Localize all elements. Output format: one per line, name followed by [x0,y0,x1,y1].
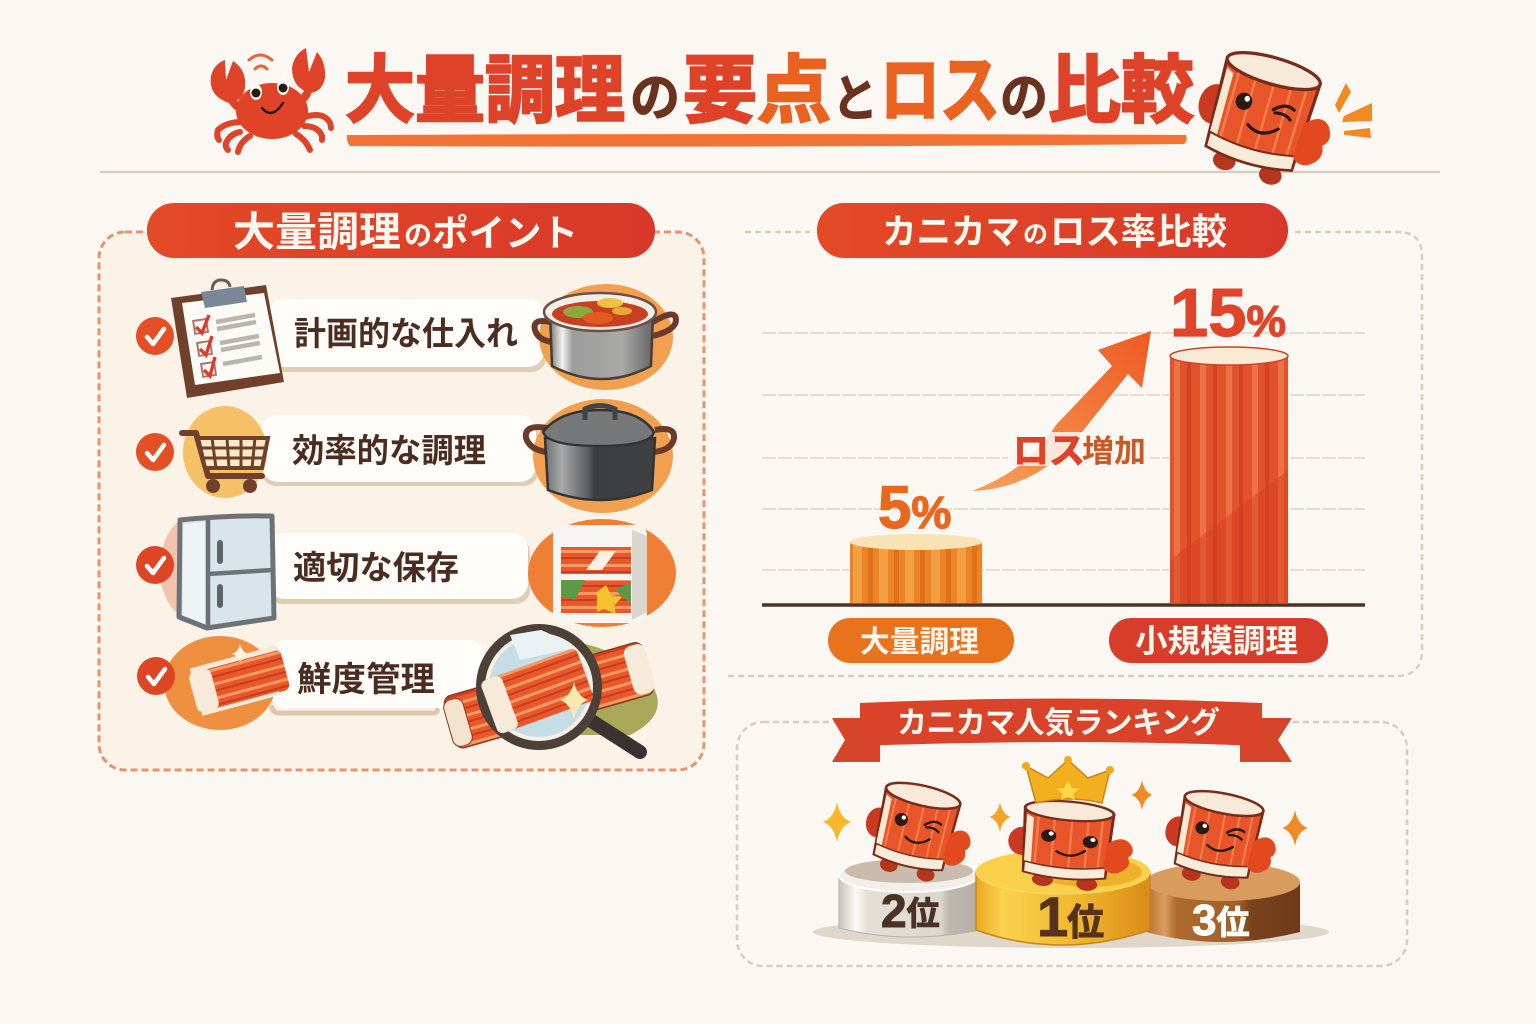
heading: cooking points: の [404,220,432,251]
title: と [832,71,878,127]
icon: soup pot [535,284,676,390]
bar: large batch 5% [850,534,982,603]
mascot: 1st [1005,797,1137,895]
podium: 2nd [839,858,980,937]
axis [762,603,1365,607]
row text 1: 計画的な仕入れ [294,315,518,352]
icon: check 2 [136,433,174,471]
ribbon heading: カニカマ人気ランキング [897,707,1220,740]
row: proper storage [136,516,676,628]
label: large batch [828,618,1014,663]
panel: ranking [737,698,1407,966]
title: 点 [757,49,831,132]
podium: 2nd: 位 [907,895,940,932]
label: loss increase: ロス [1013,430,1085,471]
heading: cooking points [147,203,655,258]
title [345,49,1194,132]
label: large batch: 大量調理 [860,626,979,659]
row: efficient cooking [136,399,674,513]
title: 比較 [1048,49,1194,132]
ribbon heading [832,698,1292,762]
label pill 2 [262,415,538,486]
icon: dark pot [526,399,674,513]
icon: sparkle 1 [823,802,851,842]
icon: magnifier over stick [441,629,658,752]
mascot: 2nd [856,775,981,889]
label: small batch [1109,618,1328,663]
title underline [347,134,1187,147]
title: 大量調理 [345,49,625,132]
label pill 3 [268,533,530,604]
icon: fridge [136,516,274,628]
mascot: 3rd [1157,784,1285,896]
podium: 3rd [1146,863,1300,945]
icon: check 1 [136,317,174,355]
label: loss increase: 増加 [1082,434,1146,469]
podium: 2nd: 2 [881,885,907,937]
label pill 4 [270,640,485,713]
row text 2: 効率的な調理 [292,432,486,469]
title: の [630,70,680,128]
row text 4: 鮮度管理 [297,661,435,699]
podium shadow [813,916,1329,948]
value: 5%: 5% [878,474,951,541]
row: planned purchasing [136,280,676,398]
heading: loss rate: カニカマ [882,213,1020,252]
arrow: loss increase [972,331,1151,491]
heading: loss rate: の [1023,221,1048,249]
icon: burst lines [1335,83,1372,138]
heading: loss rate: ロス率比較 [1050,211,1227,252]
title: ロス [880,49,1000,132]
podium: 1st [976,850,1150,948]
row: freshness management [137,629,658,752]
icon: crown [1022,756,1114,803]
heading: cooking points: ポイント [432,213,578,254]
podium: 1st: 位 [1067,902,1104,943]
icon: check 4 and stick [137,636,291,730]
icon: sparkle 4 [1282,810,1308,846]
podium: 3rd: 位 [1216,904,1249,941]
podium: 3rd: 3 [1192,896,1216,945]
label pill 1 [268,299,546,372]
mascot: title character [1182,41,1347,197]
podium: 1st: 1 [1037,885,1068,948]
value: 15%: 15% [1170,275,1286,351]
icon: sparkle 3 [1132,780,1152,810]
title: 要 [683,49,757,132]
icon: shopping cart [182,406,268,498]
panel: cooking points [99,203,1422,966]
icon: sparkle 2 [990,802,1010,832]
title: の [1000,70,1048,128]
icon: clipboard [171,280,284,398]
bar: small batch 15% [1170,347,1288,603]
row text 3: 適切な保存 [293,549,459,586]
label: loss increase [1008,430,1150,471]
label: small batch: 小規模調理 [1135,623,1298,659]
icon: crab [211,48,331,152]
heading: cooking points: 大量調理 [233,209,401,255]
heading: loss rate [817,203,1288,258]
panel: loss rate chart [727,203,1422,676]
icon: storage container [528,519,676,627]
